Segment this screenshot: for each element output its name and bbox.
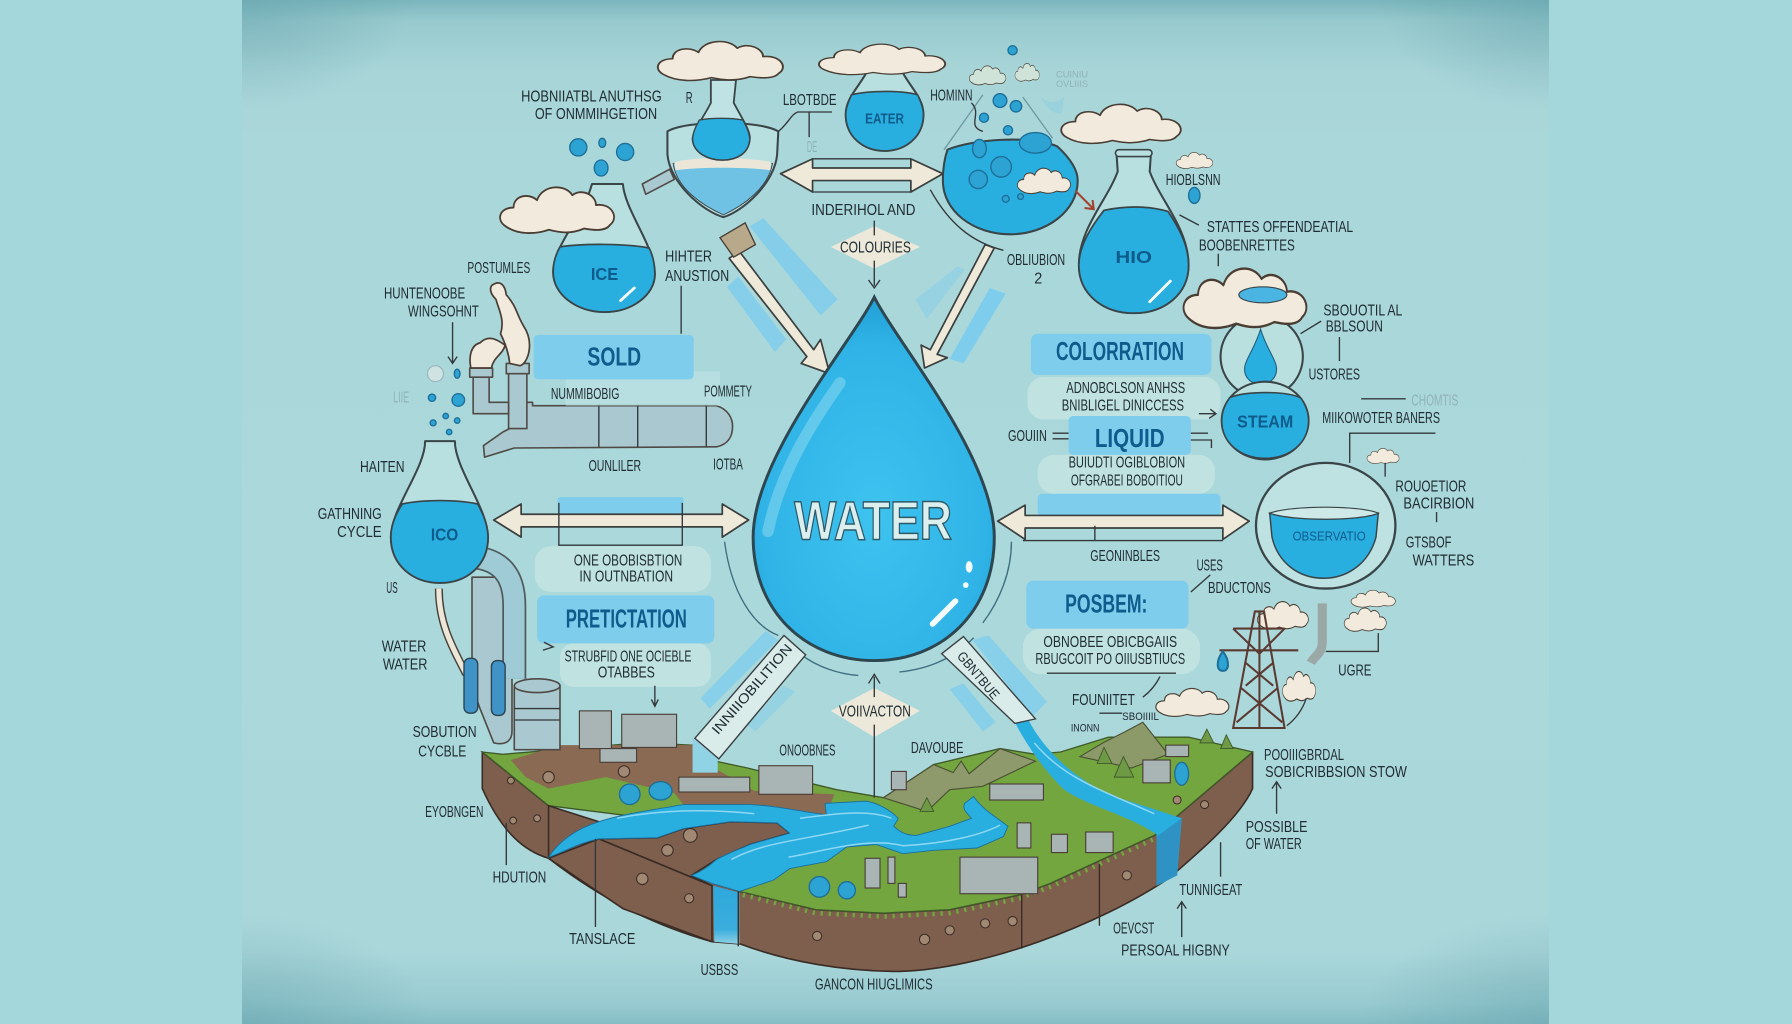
waterfall stub: [693, 738, 718, 773]
arrow: right double: [998, 505, 1249, 539]
clouds: [500, 41, 1399, 716]
labels: STRUBFID ONE OCIEBLE: [565, 649, 691, 666]
labels: HIHTER: [665, 249, 712, 266]
labels: SOBUTION: [413, 724, 477, 741]
heading: POSBEM: POSBEM:: [1065, 589, 1147, 619]
labels: HUNTENOOBE: [384, 285, 465, 302]
cooling pipes under ICO flask: [439, 557, 514, 744]
labels: CHOMTIS: [1411, 393, 1458, 410]
heading: SOLD: SOLD: [587, 342, 641, 372]
labels: POSTUMLES: [467, 260, 530, 277]
labels: CUINIU: [1056, 70, 1088, 80]
labels: UGRE: [1338, 662, 1371, 679]
transmission tower: [1218, 603, 1378, 728]
soil side: [482, 752, 1253, 971]
labels: OTABBES: [598, 665, 655, 682]
lower-left band: INNIIIOBILITION: [709, 641, 795, 737]
land block: [482, 711, 1253, 971]
labels: ANUSTION: [665, 268, 729, 285]
callout: colourless: COLOURIES: [840, 240, 911, 257]
labels: WATER: [383, 657, 427, 674]
labels: OF ONMMIHGETION: [535, 106, 657, 123]
labels: GATHNING: [318, 506, 382, 523]
labels: USBSS: [701, 962, 738, 979]
labels: HOMINN: [930, 88, 973, 105]
bubbles above ICE: [570, 138, 634, 176]
labels: RBUGCOIT PO OIIUSBTIUCS: [1035, 651, 1185, 668]
labels: HDUTION: [493, 869, 546, 886]
labels: 2: [1034, 270, 1042, 287]
labels: MIIKOWOTER BANERS: [1322, 410, 1440, 427]
callout: lower diamond: VOIIVACTON: [839, 704, 911, 721]
horizontal pipe and chimneys: [470, 363, 733, 457]
labels: WATTERS: [1413, 553, 1474, 570]
labels: HIOBLSNN: [1166, 172, 1221, 189]
labels: FOUNIITET: [1072, 692, 1135, 709]
middle soil block: [599, 822, 790, 886]
labels: ADNOBCLSON ANHSS: [1066, 380, 1185, 397]
arrow: flask to drop: [921, 245, 994, 368]
mountains: [883, 749, 1035, 811]
arrow: left double: [494, 504, 749, 537]
labels: GANCON HIUGLIMICS: [815, 977, 933, 994]
labels: OUNLILER: [589, 458, 641, 475]
labels: SBOIIIIL: [1122, 711, 1159, 723]
labels: USES: [1197, 557, 1223, 574]
labels: BDUCTONS: [1208, 580, 1271, 597]
sphere with drop: [1221, 315, 1303, 398]
flask: ICO: [391, 441, 488, 583]
river: [549, 797, 1008, 891]
labels: POSSIBLE: [1246, 819, 1307, 836]
labels: GTSBOF: [1406, 534, 1451, 551]
brown ground: [511, 745, 834, 815]
panel: blue and pale label boxes: [534, 334, 1221, 687]
drops near pipe: [427, 366, 465, 435]
labels: LBOTBDE: [783, 92, 837, 109]
heading: LIQUID: LIQUID: [1095, 423, 1165, 453]
green surface: [482, 737, 1253, 913]
labels: ONOOBNES: [779, 742, 835, 759]
labels: POOIIIGBRDAL: [1264, 747, 1344, 764]
flask: EATER: [846, 69, 923, 151]
labels: BACIRBION: [1403, 496, 1474, 513]
funnel clamp: [720, 223, 755, 257]
labels: [318, 70, 1474, 994]
big water drop: [753, 297, 994, 661]
labels: EYOBNGEN: [425, 804, 483, 821]
labels: ONE OBOBISBTION: [574, 553, 682, 570]
labels: INONN: [1071, 722, 1099, 734]
heading: PRETICTATION: PRETICTATION: [566, 603, 687, 633]
river right stream: [1015, 720, 1182, 886]
labels: BNIBLIGEL DINICCESS: [1062, 397, 1184, 414]
labels: WATER: [382, 638, 426, 655]
labels: IOTBA: [713, 457, 743, 474]
callout: colourless: [831, 221, 920, 288]
labels: GOUIIN: [1008, 428, 1047, 445]
large bubbling flask: [930, 46, 1094, 250]
label: observation: OBSERVATIO: [1293, 530, 1366, 544]
labels: DE: [807, 139, 817, 156]
title: WATER: WATER: [794, 489, 952, 551]
labels: INDERIHOL AND: [811, 202, 915, 219]
soil seams: [738, 864, 1099, 949]
label: ICO: ICO: [431, 525, 458, 545]
labels: BUIUDTI OGIBLOBION: [1069, 454, 1185, 471]
labels: TANSLACE: [569, 931, 635, 948]
flask: HIO: [1079, 150, 1200, 313]
labels: OBNOBEE OBICBGAIIS: [1043, 634, 1177, 651]
blue accent bands: [701, 218, 1047, 731]
waterfall left: [713, 886, 739, 944]
labels: WINGSOHNT: [408, 304, 479, 321]
labels: IN OUTNBATION: [579, 569, 673, 586]
callout: lower diamond: [831, 674, 920, 798]
tank: [514, 679, 560, 750]
heading: COLORRATION: COLORRATION: [1056, 336, 1184, 366]
labels: NUMMIBOBIG: [551, 386, 619, 403]
leader lines: [448, 103, 1437, 937]
flask: ICE: [553, 184, 655, 312]
labels: TUNNIGEAT: [1179, 882, 1243, 899]
labels: ROUOETIOR: [1395, 478, 1466, 495]
labels: PERSOAL HIGBNY: [1121, 942, 1230, 959]
sphere: STEAM: [1222, 382, 1309, 459]
labels: R: [686, 90, 693, 107]
vehicles and buildings: [579, 711, 1233, 897]
lower-left band: [695, 635, 806, 759]
water ripples: [617, 743, 1154, 859]
arrow: funnel to drop: [729, 251, 830, 374]
label: ICE: ICE: [591, 264, 618, 284]
labels: BOOBENRETTES: [1199, 237, 1295, 254]
smoke plumes: [470, 283, 529, 368]
label: STEAM: STEAM: [1237, 411, 1293, 431]
labels: GEONINBLES: [1090, 548, 1160, 565]
labels: OF WATER: [1246, 836, 1302, 853]
labels: LIIE: [393, 389, 409, 406]
funnel flask: [642, 80, 778, 217]
lower-right band: [942, 637, 1035, 723]
labels: OVLIIIS: [1056, 79, 1088, 89]
arrow: top double: [781, 159, 943, 192]
lower-right band: GBNTBUE: [954, 649, 1002, 702]
background panel: [242, 0, 1549, 1024]
labels: HOBNIIATBL ANUTHSG: [521, 89, 662, 106]
labels: SBOUOTIL AL: [1323, 302, 1403, 319]
circle with water bowl: [1256, 463, 1395, 589]
label: HIO: HIO: [1115, 247, 1152, 267]
labels: USTORES: [1309, 366, 1360, 383]
labels: STATTES OFFENDEATIAL: [1207, 219, 1353, 236]
cut face: [549, 806, 599, 858]
labels: HAITEN: [360, 459, 405, 476]
labels: CYCLE: [337, 524, 382, 541]
label: EATER: EATER: [865, 111, 904, 127]
grass fringe: [743, 839, 1154, 917]
labels: US: [386, 580, 398, 597]
labels: CYCBLE: [418, 744, 466, 761]
labels: OFGRABEI BOBOITIOU: [1071, 473, 1183, 490]
labels: OBLIUBION: [1007, 252, 1065, 269]
labels: DAVOUBE: [911, 740, 963, 757]
labels: OEVCST: [1113, 921, 1155, 938]
water balls: [619, 762, 1189, 899]
labels: BBLSOUN: [1326, 318, 1383, 335]
arcs around drop: [725, 542, 1011, 675]
labels: SOBICRIBBSION STOW: [1265, 764, 1407, 781]
soil stones: [507, 766, 1209, 945]
labels: POMMETY: [704, 384, 752, 401]
